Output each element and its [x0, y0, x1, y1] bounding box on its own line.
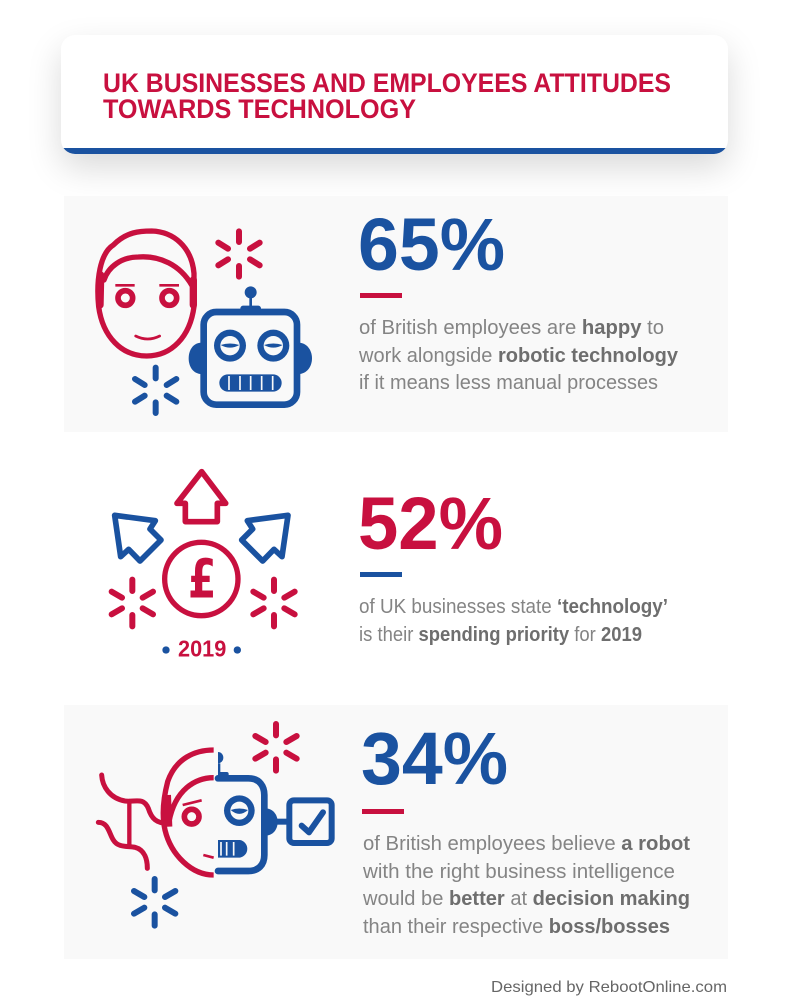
robot half [218, 752, 290, 871]
pound coin: £ [188, 547, 216, 610]
text: 65 percent description: if it means less manual processes [359, 372, 658, 394]
title: TOWARDS TECHNOLOGY [103, 94, 416, 124]
right spark [253, 580, 295, 626]
text: 65 percent description: of British employees are happy to [359, 317, 664, 339]
accent bar [360, 293, 402, 298]
title: UK BUSINESSES AND EMPLOYEES ATTITUDES [103, 68, 671, 98]
wires [98, 775, 168, 868]
panel: 34 percent background [64, 705, 728, 959]
text: 52 percent description [359, 596, 668, 646]
icon: human face and robot [98, 231, 312, 413]
blue spark [135, 368, 176, 413]
accent bar [360, 572, 402, 577]
footer credit: Designed by RebootOnline.com [491, 979, 727, 996]
pound coin [165, 542, 238, 616]
up arrow [177, 472, 226, 522]
stat: 34 percent: 34% [361, 717, 508, 800]
left spark [112, 580, 153, 626]
text: 34 percent description: would be better at decision making [362, 888, 690, 910]
human face [98, 231, 194, 356]
text: 34 percent description: with the right business intelligence [362, 861, 675, 883]
right arrow [242, 515, 288, 561]
text: 34 percent description: than their respective boss/bosses [363, 916, 670, 938]
checkbox [289, 800, 332, 843]
text: 65 percent description [358, 317, 679, 394]
blue spark [134, 879, 175, 926]
robot [189, 286, 312, 405]
text: 34 percent description: of British employees believe a robot [363, 833, 690, 855]
icon: half human half robot [98, 724, 332, 926]
title [103, 68, 671, 124]
year label [162, 636, 241, 662]
red spark [218, 231, 260, 277]
text: 52 percent description: of UK businesses state ‘technology’ [359, 596, 668, 618]
year label: 2019 [178, 636, 226, 662]
header card [61, 35, 728, 154]
text: 65 percent description: work alongside robotic technology [358, 345, 679, 367]
left arrow [115, 515, 161, 561]
human half [163, 750, 214, 875]
text: 34 percent description [362, 833, 690, 938]
stat: 65 percent: 65% [358, 203, 505, 286]
icon: pound with arrows and 2019 [112, 472, 295, 662]
red spark [255, 724, 297, 771]
panel: 65 percent background [64, 196, 728, 432]
text: 52 percent description: is their spending priority for 2019 [359, 624, 642, 646]
accent bar [362, 809, 404, 814]
stat: 52 percent: 52% [358, 482, 503, 565]
